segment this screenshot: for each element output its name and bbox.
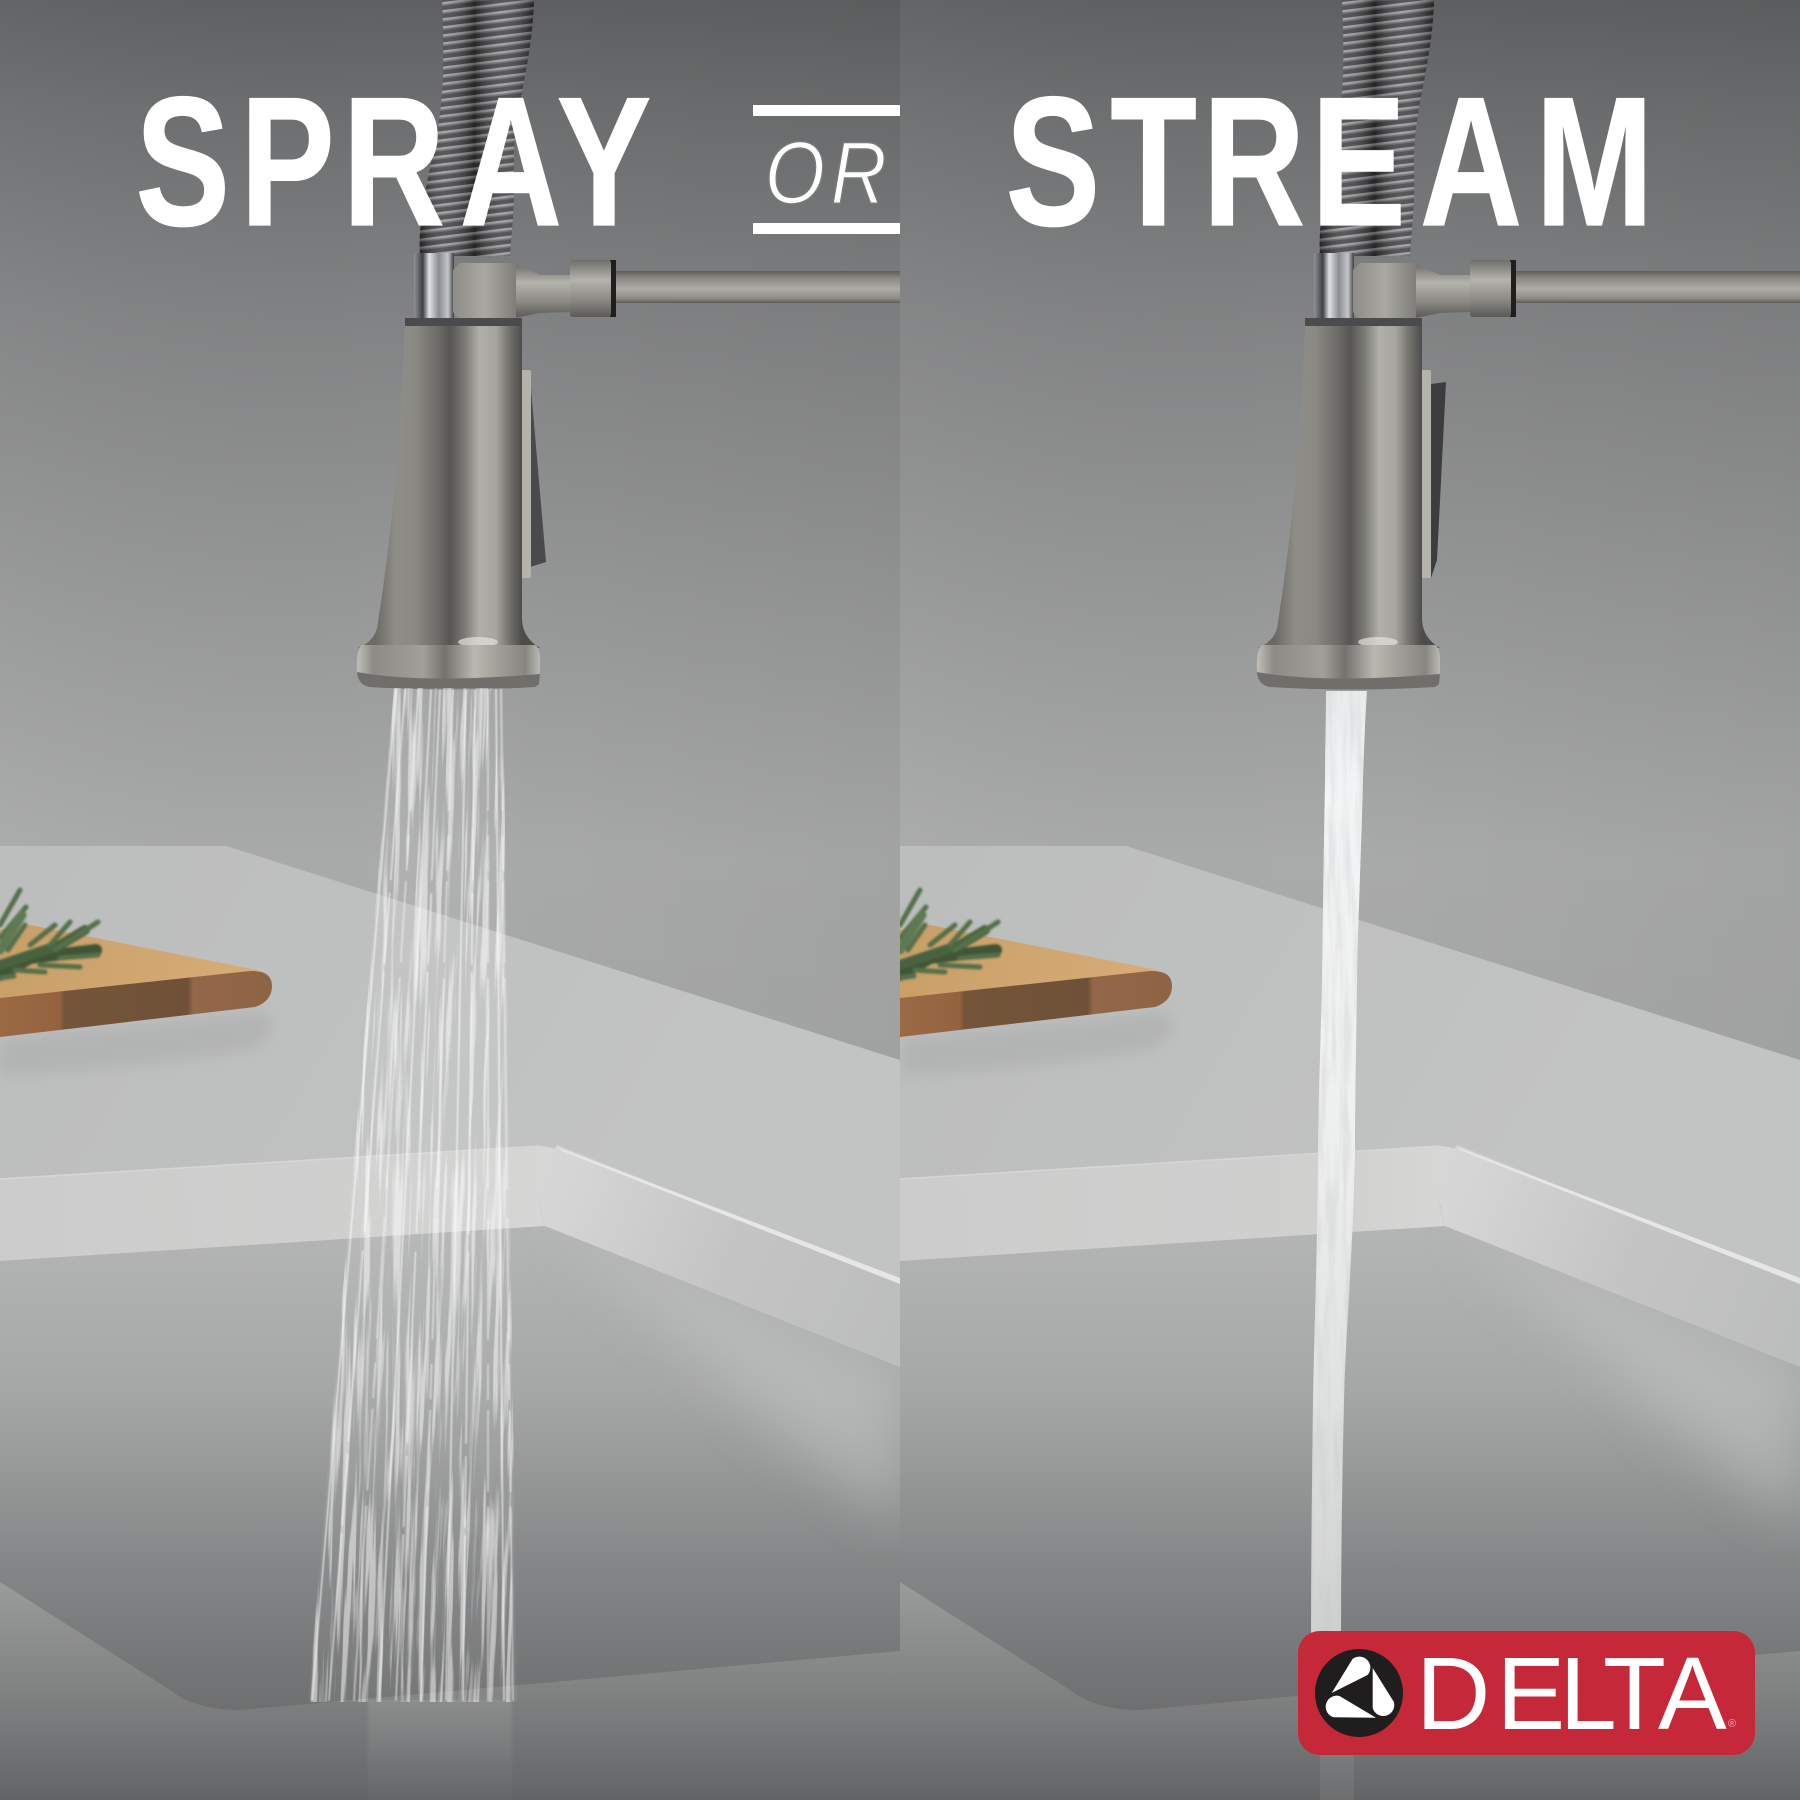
icon: Delta triangle mark <box>1315 1649 1403 1737</box>
logo: Delta <box>1298 1631 1755 1755</box>
faucet collar and arm <box>414 253 900 319</box>
heading: STREAM: STREAM <box>1006 58 1653 264</box>
rosemary <box>0 890 98 978</box>
faucet collar and arm <box>1314 253 1800 319</box>
cutting board <box>0 925 272 1037</box>
cutting board <box>900 925 1172 1037</box>
panel: stream <box>900 0 1800 1800</box>
heading: OR with rules: OR <box>765 123 887 222</box>
registered mark: ® <box>1728 1718 1736 1730</box>
wordmark: DELTA <box>1416 1636 1727 1751</box>
kitchen background <box>0 0 900 1800</box>
stream water <box>1311 691 1367 1800</box>
heading: OR with rules <box>753 105 900 234</box>
kitchen background <box>900 0 1800 1800</box>
faucet spray head <box>1257 318 1446 690</box>
faucet hose <box>1320 0 1434 256</box>
faucet hose <box>420 0 534 256</box>
heading: SPRAY: SPRAY <box>136 58 651 264</box>
panel: spray <box>0 0 900 1800</box>
spray water <box>310 688 517 1742</box>
faucet spray head <box>357 318 546 690</box>
rosemary <box>900 890 998 978</box>
